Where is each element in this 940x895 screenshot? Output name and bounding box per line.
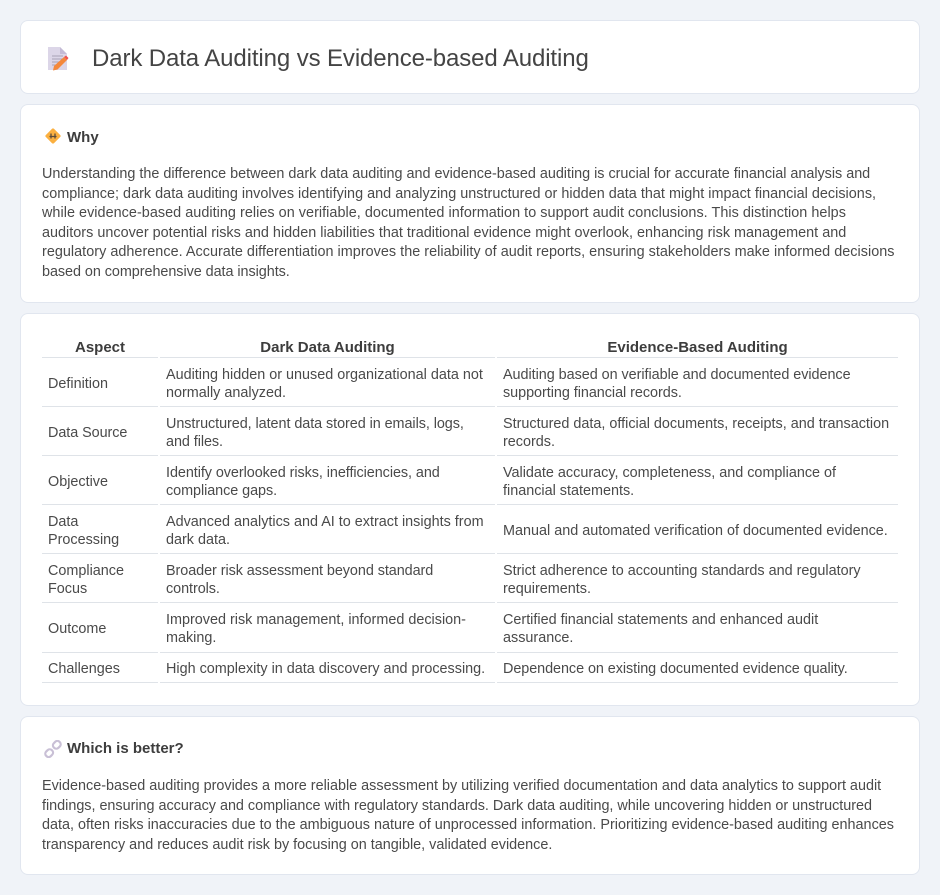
title: Dark Data Auditing vs Evidence-based Auditing xyxy=(92,45,589,72)
row: data source: Data Source xyxy=(48,424,127,440)
table header: dark data auditing xyxy=(160,338,495,358)
text block: why: auditors uncover potential risks and hidden liabilities that traditional evidence might overlook, enhancing risk management and xyxy=(42,225,846,241)
row: definition: Auditing hidden or unused organizational data not xyxy=(166,366,483,382)
table header: aspect xyxy=(42,338,158,358)
icon: warning diamond xyxy=(45,128,61,144)
panel: which is better xyxy=(20,716,920,875)
row: definition xyxy=(42,366,898,407)
row: outcome: making. xyxy=(166,630,216,646)
row: data processing: Processing xyxy=(48,532,119,548)
text block: which is better xyxy=(42,778,894,853)
heading: which is better: Which is better? xyxy=(67,740,184,757)
row: compliance focus: Compliance xyxy=(48,562,124,578)
row: compliance focus: Broader risk assessment beyond standard xyxy=(166,562,433,578)
row: challenges: High complexity in data discovery and processing. xyxy=(166,661,485,677)
table header: evidence-based auditing: Evidence-Based Auditing xyxy=(607,339,788,356)
text block: which is better: transparency and reduces audit risk by focusing on tangible, validated evidence. xyxy=(42,837,552,853)
text block: why xyxy=(42,166,894,280)
icon: chain link xyxy=(44,740,62,758)
text block: which is better: data, often risks inaccuracies due to the ambiguous nature of unprocessed information. Prioritizing evidence-based auditing enhances xyxy=(42,817,894,833)
row: definition: normally analyzed. xyxy=(166,384,286,400)
panel: comparison table xyxy=(20,313,920,706)
table header: dark data auditing: Dark Data Auditing xyxy=(260,339,395,356)
row: objective xyxy=(42,464,898,505)
row: outcome: Outcome xyxy=(48,621,106,637)
row: compliance focus: Strict adherence to accounting standards and regulatory xyxy=(503,562,861,578)
row: data processing xyxy=(42,514,898,554)
icon: document with pencil xyxy=(48,47,68,70)
row: data source: Structured data, official documents, receipts, and transaction xyxy=(503,416,889,432)
text block: why: Understanding the difference between dark data auditing and evidence-based auditing is crucial for accurate financial analysis and xyxy=(42,166,870,182)
row: outcome: assurance. xyxy=(503,630,573,646)
text block: why: while evidence-based auditing relies on verifiable, documented information to support audit conclusions. This distinction helps xyxy=(42,205,846,221)
row: data processing: Data xyxy=(48,514,78,530)
text block: which is better: Evidence-based auditing provides a more reliable assessment by utilizing verified documentation and data analytics to support audit xyxy=(42,778,881,794)
row: compliance focus xyxy=(42,562,898,603)
row: objective: Validate accuracy, completeness, and compliance of xyxy=(503,464,836,480)
row: objective: compliance gaps. xyxy=(166,482,277,498)
panel: why xyxy=(20,104,920,303)
row: objective: financial statements. xyxy=(503,482,634,498)
row: objective: Identify overlooked risks, inefficiencies, and xyxy=(166,464,440,480)
row: data source: records. xyxy=(503,434,555,450)
row: data processing: dark data. xyxy=(166,532,230,548)
row: definition: Auditing based on verifiable and documented evidence xyxy=(503,366,851,382)
row: compliance focus: requirements. xyxy=(503,580,591,596)
row: objective: Objective xyxy=(48,474,108,490)
row: outcome: Certified financial statements and enhanced audit xyxy=(503,612,818,628)
row: definition: Definition xyxy=(48,376,108,392)
row: data source: Unstructured, latent data stored in emails, logs, xyxy=(166,416,464,432)
row: outcome xyxy=(42,612,898,653)
text block: why: based on comprehensive data insights. xyxy=(42,264,290,280)
table header: aspect: Aspect xyxy=(75,339,125,356)
row: outcome: Improved risk management, informed decision- xyxy=(166,612,466,628)
text block: why: compliance; dark data auditing involves identifying and analyzing unstructured or hidden data that might impact financial decisions, xyxy=(42,186,876,202)
table header: evidence-based auditing xyxy=(497,338,898,358)
row: challenges: Dependence on existing documented evidence quality. xyxy=(503,661,848,677)
row: challenges xyxy=(42,661,898,683)
row: compliance focus: Focus xyxy=(48,580,87,596)
row: compliance focus: controls. xyxy=(166,580,220,596)
text block: which is better: findings, ensuring accuracy and compliance with regulatory standards. Dark data auditing, while uncovering hidden or unstructured xyxy=(42,798,872,814)
row: data processing: Advanced analytics and AI to extract insights from xyxy=(166,514,484,530)
row: data source xyxy=(42,416,898,456)
row: data source: and files. xyxy=(166,434,223,450)
row: definition: supporting financial records. xyxy=(503,384,682,400)
panel: header xyxy=(20,20,920,94)
text block: why: regulatory adherence. Accurate differentiation improves the reliability of audit reports, ensuring stakeholders make informed decisions xyxy=(42,244,894,260)
row: data processing: Manual and automated verification of documented evidence. xyxy=(503,522,888,538)
row: challenges: Challenges xyxy=(48,661,120,677)
heading: why: Why xyxy=(67,129,99,146)
